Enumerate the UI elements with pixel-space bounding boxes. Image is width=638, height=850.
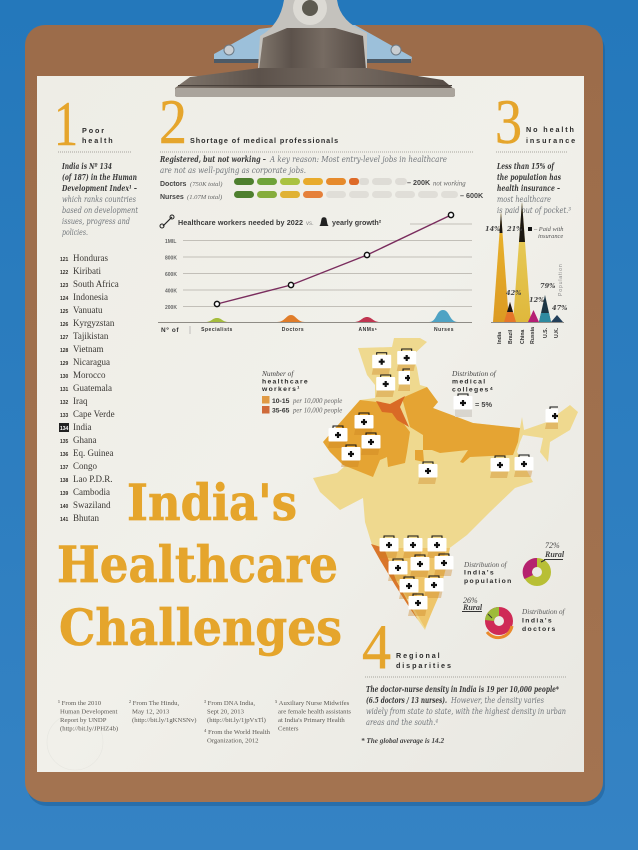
donut: doctors distribution: Rural (462, 603, 483, 612)
nurses pill bar: Nurses (160, 194, 184, 201)
country ranking list: Honduras (73, 253, 108, 263)
donut: doctors distribution: India's (522, 618, 553, 624)
grid and axis (158, 224, 472, 334)
map legend: healthcare workers: per 10,000 people (292, 398, 342, 405)
triangle chart: 14% (485, 225, 500, 233)
donut: population distribution: population (464, 578, 513, 585)
main title: India's (127, 473, 297, 532)
country ranking list: Indonesia (73, 292, 108, 302)
density text: The doctor-nurse density in India is 19 per 10,000 people* (366, 684, 560, 694)
country ranking list: 135 (60, 439, 69, 445)
nurses pill bar: – 600K (460, 191, 484, 200)
high density states (371, 396, 425, 630)
doctors pill bar: (750K total) (190, 181, 222, 188)
map legend: medical colleges: medical (452, 378, 486, 386)
grid and axis: 200K (165, 305, 177, 311)
country ranking list: Kyrgyzstan (73, 318, 115, 328)
country ranking list: 124 (60, 296, 69, 302)
main title: Challenges (59, 598, 342, 657)
heading poor health (82, 126, 115, 145)
donut: population distribution: 72% (545, 541, 560, 550)
section 2: shortage of medical professionals (158, 86, 484, 334)
density text: areas and the south.⁴ (366, 718, 438, 727)
map legend: medical colleges: Distribution of (451, 369, 497, 378)
country ranking list: Eq. Guinea (73, 448, 114, 458)
donut: population distribution: India's (464, 570, 495, 576)
map legend: healthcare workers: healthcare (262, 378, 309, 386)
doctors pill bar: Doctors (160, 181, 187, 188)
HDI intro text: India is Nº 134 (61, 161, 112, 171)
density text: (6.5 doctors / 13 nurses). (366, 695, 447, 705)
footnote 2: ² From The Hindu, (129, 700, 180, 707)
country ranking list: Kiribati (73, 266, 101, 276)
population axis label: Population (558, 263, 564, 296)
country axis labels: U.S. (543, 327, 549, 338)
insurance text: Less than 15% of (496, 161, 555, 171)
country ranking list: Congo (73, 461, 98, 471)
footnote 1: Report by UNDP (60, 717, 107, 724)
metal clip (175, 0, 455, 97)
chart legend: yearly growth² (332, 218, 382, 227)
footnote 5: Centers (278, 726, 299, 732)
registered but not working text: are not as well-paying as corporate jobs. (160, 166, 306, 175)
x axis labels (161, 327, 454, 334)
country ranking list: 121 (60, 257, 69, 263)
triangle chart: 79% (540, 282, 555, 290)
country ranking list: South Africa (73, 279, 119, 289)
country axis labels: China (520, 329, 526, 344)
footnote 5: at India's Primary Health (278, 717, 345, 724)
country ranking list: 133 (60, 413, 69, 419)
country ranking list: India (73, 422, 92, 432)
doctors pill bar: – 200K (407, 178, 431, 187)
country ranking list: 132 (60, 400, 69, 406)
number 2: 2 (159, 86, 187, 157)
country ranking list: 134 (60, 426, 69, 432)
map legend: healthcare workers: 35-65 (272, 408, 290, 414)
footnote 3: (http://bit.ly/1jpVxTl) (207, 717, 266, 724)
footnote 1: ¹ From the 2010 (58, 700, 102, 707)
registered but not working text: A key reason: Most entry-level jobs in healthcare (269, 155, 447, 164)
triangle chart: 12% (529, 296, 544, 304)
nurses pill bar (160, 191, 484, 201)
medical college kits (328, 349, 564, 616)
footnote 5 (275, 700, 351, 732)
grid and axis: 1MIL (165, 239, 176, 245)
heading regional disparities: disparities (396, 661, 453, 670)
country ranking list: 130 (60, 374, 69, 380)
footnote 1: (http://bit.ly/JPHZ4b) (60, 726, 118, 732)
HDI intro text (61, 161, 139, 237)
heading regional disparities (396, 651, 453, 670)
HDI intro text: Development Index¹ – (61, 183, 137, 193)
country axis labels: U.K. (554, 327, 560, 338)
heading regional disparities: Regional (396, 651, 442, 660)
HDI intro text: based on development (62, 206, 139, 215)
map legend: medical colleges: = 5% (475, 400, 492, 409)
triangle chart (485, 202, 567, 322)
country ranking list: 131 (60, 387, 69, 393)
footnote 4: Organization, 2012 (207, 738, 259, 744)
nurses pill bar: (1.07M total) (187, 194, 222, 201)
map legend: healthcare workers: Number of (261, 369, 294, 378)
section 3: no health insurance (485, 86, 577, 344)
map legend: healthcare workers: 10-15 (272, 398, 290, 405)
main title (57, 473, 342, 657)
number 3: 3 (495, 86, 522, 157)
line chart: workers needed vs yearly growth (158, 212, 472, 334)
HDI intro text: which ranks countries (62, 195, 136, 204)
footnote 3 (204, 700, 266, 724)
footnote 5: ⁵ Auxiliary Nurse Midwifes (275, 700, 350, 707)
country ranking list: 128 (60, 348, 69, 354)
chart legend: Healthcare workers needed by 2022 (178, 218, 303, 227)
medium density states (323, 387, 520, 628)
footnote 2: (http://bit.ly/1gKNSNv) (132, 717, 196, 724)
registered but not working text (159, 154, 447, 175)
workers line (214, 212, 454, 307)
country ranking list: 140 (60, 504, 69, 510)
country ranking list: Cape Verde (73, 409, 115, 419)
country ranking list: 141 (60, 517, 69, 523)
section 4: regional disparities (361, 611, 567, 745)
donut: population distribution (463, 541, 565, 585)
country ranking list: Iraq (73, 396, 88, 406)
x axis labels: Specialists (201, 327, 233, 333)
footnote 5: are female health assistants (278, 708, 351, 716)
country ranking list: Tajikistan (73, 331, 109, 341)
insurance text: health insurance – (497, 183, 560, 193)
country ranking list: 138 (60, 478, 69, 484)
x axis labels: ANMs⁵ (358, 327, 378, 333)
x axis labels: Nº of (161, 327, 179, 334)
country ranking list (59, 253, 119, 523)
yearly growth bells (205, 310, 458, 322)
density text: widely from state to state, with the highest density in urban (366, 707, 566, 716)
footnote 3: ³ From DNA India, (204, 700, 255, 707)
paid with insurance legend (528, 226, 563, 240)
country ranking list: Lao P.D.R. (73, 474, 113, 484)
number 4: 4 (362, 611, 391, 682)
map legend: healthcare workers: per 10,000 people (292, 408, 342, 414)
heading no health insurance: insurance (526, 136, 577, 145)
footnote 4: ⁴ From the World Health (204, 729, 271, 736)
donut: population distribution: Rural (544, 550, 565, 559)
heading poor health: health (82, 136, 115, 145)
footnote 3: Sept 20, 2013 (207, 708, 245, 716)
grid and axis: 600K (165, 272, 177, 278)
footnote 2 (129, 700, 196, 724)
country ranking list: 136 (60, 452, 69, 458)
country ranking list: Swaziland (73, 500, 111, 510)
paid with insurance legend: – Paid with (533, 226, 563, 233)
heading poor health: Poor (82, 126, 106, 135)
country ranking list: Vietnam (73, 344, 103, 354)
global average note: * The global average is 14.2 (361, 737, 444, 745)
HDI intro text: policies. (62, 228, 88, 237)
insurance text: the population has (497, 172, 561, 182)
country ranking list: 139 (60, 491, 69, 497)
India map (313, 338, 578, 630)
heading no health insurance (526, 125, 577, 145)
footnote 1 (58, 700, 118, 732)
footnote 2: May 12, 2013 (132, 708, 170, 716)
grid and axis: 400K (165, 288, 177, 294)
heading no health insurance: No health (526, 125, 576, 134)
country ranking list: Cambodia (73, 487, 110, 497)
section 1: poor health (54, 88, 139, 523)
insurance text (496, 161, 571, 215)
country ranking list: Vanuatu (73, 305, 103, 315)
country ranking list: 127 (60, 335, 69, 341)
country ranking list: Ghana (73, 435, 96, 445)
country axis labels (497, 327, 560, 344)
country ranking list: 122 (60, 270, 69, 276)
insurance text: most healthcare (497, 195, 551, 204)
chart legend: vs. (306, 221, 314, 227)
country ranking list: Guatemala (73, 383, 112, 393)
grid and axis: 800K (165, 256, 177, 262)
footnote 1: Human Development (60, 708, 118, 716)
map legend: medical colleges: colleges⁴ (452, 386, 494, 394)
paid with insurance legend: insurance (538, 233, 563, 240)
x axis labels: Nurses (434, 327, 454, 333)
country ranking list: 129 (60, 361, 69, 367)
density text (366, 684, 566, 727)
map legend: healthcare workers (261, 369, 342, 414)
donut: doctors distribution: doctors (522, 626, 557, 633)
chart legend (160, 215, 382, 228)
map legend: healthcare workers: workers¹ (261, 386, 301, 393)
country axis labels: India (497, 332, 503, 344)
doctors pill bar: not working (433, 180, 466, 188)
donut: population distribution: Distribution of (463, 561, 508, 569)
base light states (313, 338, 578, 630)
donut: doctors distribution (462, 596, 566, 638)
country ranking list: 123 (60, 283, 69, 289)
donut: doctors distribution: 26% (463, 596, 478, 605)
x axis labels: Doctors (282, 327, 304, 333)
registered but not working text: Registered, but not working – (159, 154, 266, 164)
number 1: 1 (54, 88, 78, 159)
triangle chart: 21% (506, 225, 522, 233)
paper sheet (37, 76, 584, 772)
country ranking list: Bhutan (73, 513, 99, 523)
map legend: medical colleges (451, 369, 497, 417)
country ranking list: 125 (60, 309, 69, 315)
main title: Healthcare (57, 535, 338, 594)
HDI intro text: issues, progress and (62, 217, 130, 226)
country axis labels: Russia (530, 327, 536, 344)
insurance text: is paid out of pocket.³ (497, 206, 571, 215)
footnote 4 (204, 729, 271, 744)
country ranking list: Nicaragua (73, 357, 110, 367)
footnotes (58, 700, 351, 744)
density text: However, the density varies (450, 696, 544, 705)
country ranking list: Morocco (73, 370, 106, 380)
heading shortage: Shortage of medical professionals (190, 136, 340, 145)
HDI intro text: (of 187) in the Human (62, 172, 137, 182)
triangle chart: 47% (552, 304, 567, 312)
country axis labels: Brazil (508, 329, 514, 344)
donut: doctors distribution: Distribution of (521, 608, 566, 616)
country ranking list: 137 (60, 465, 69, 471)
country ranking list: 126 (60, 322, 69, 328)
triangle chart: 42% (506, 289, 521, 297)
doctors pill bar (160, 178, 466, 188)
